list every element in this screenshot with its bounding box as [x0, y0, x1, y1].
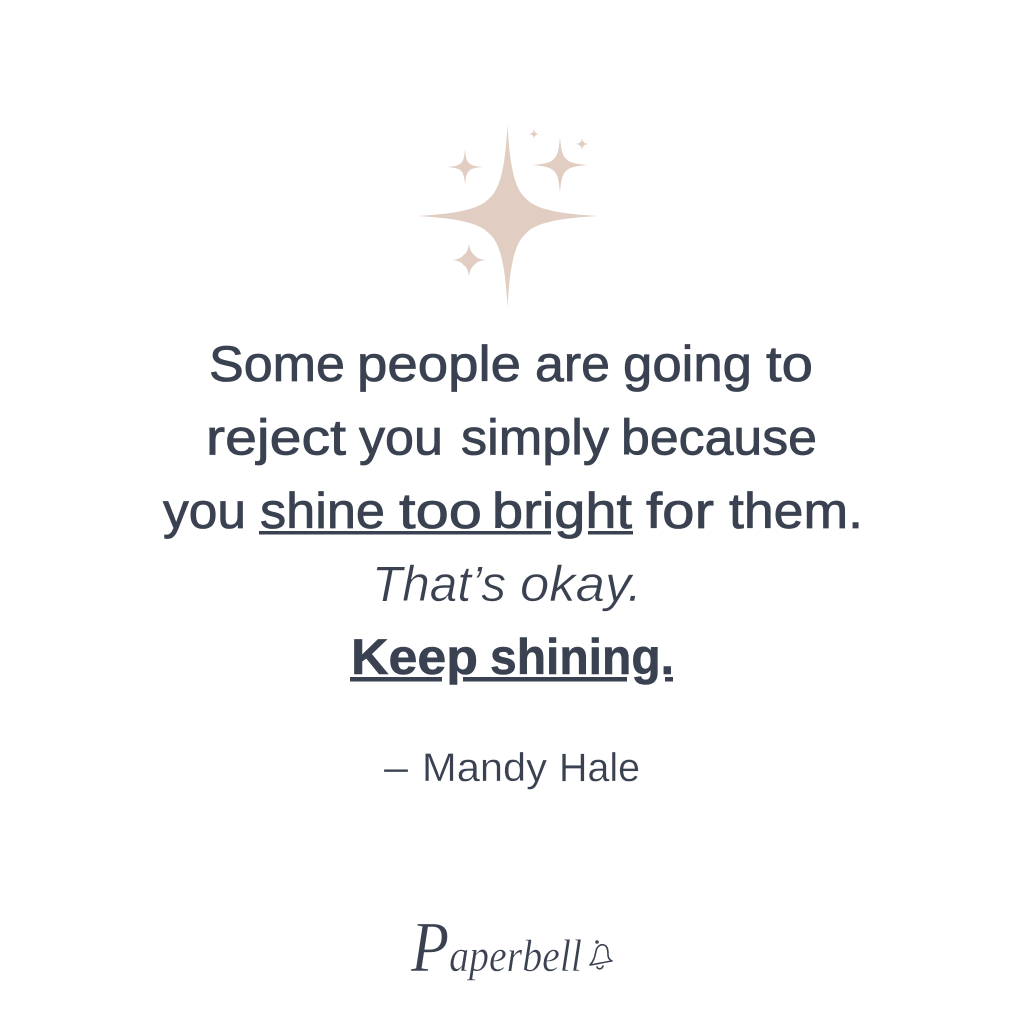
quote line 3 with underlined phrase: bright [492, 483, 632, 539]
attribution: Mandy [422, 746, 547, 790]
quote text [163, 336, 863, 790]
quote line 2: you [359, 410, 443, 466]
bold underlined line: Keep [351, 629, 478, 685]
bold underlined line [350, 629, 674, 685]
quote line 2: because [621, 410, 817, 466]
italic line [372, 556, 642, 612]
quote line 2: reject [206, 410, 346, 466]
quote line 1 [209, 336, 813, 392]
quote line 3 with underlined phrase: shine [260, 483, 385, 539]
quote line 3 with underlined phrase: for [646, 483, 714, 539]
attribution: Hale [559, 746, 640, 790]
quote line 3 with underlined phrase: them. [729, 483, 863, 539]
quote line 3 with underlined phrase [163, 483, 863, 539]
logo: Paperbell [410, 907, 612, 987]
italic line: okay. [520, 556, 642, 612]
icon: bell [590, 941, 612, 969]
bold underlined line: shining. [490, 629, 674, 685]
italic line: That’s [372, 556, 506, 612]
attribution [384, 746, 640, 790]
quote line 3 with underlined phrase: too [399, 483, 482, 539]
logo wordmark: Paperbell [410, 907, 582, 987]
attribution: — [384, 746, 408, 790]
icon: sparkle stars [417, 125, 598, 307]
quote line 1: people [357, 336, 521, 392]
quote line 1: are [535, 336, 610, 392]
quote line 1: going [623, 336, 752, 392]
quote line 2 [206, 410, 817, 466]
quote line 1: to [766, 336, 813, 392]
quote line 1: Some [209, 336, 345, 392]
quote line 3 with underlined phrase: you [163, 483, 246, 539]
quote line 2: simply [461, 410, 609, 466]
